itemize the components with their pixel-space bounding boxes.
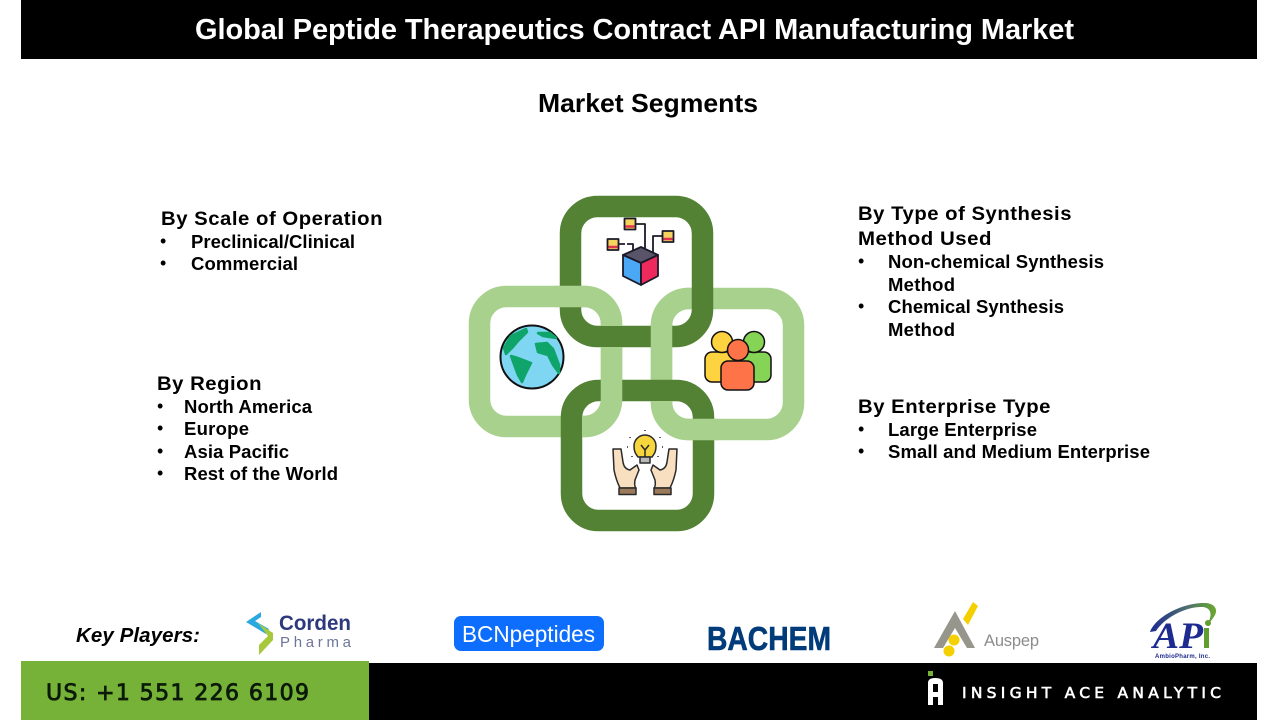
logo: AmbioPharm API — [1150, 603, 1216, 660]
text block: by enterprise type: Small and Medium Enterprise — [888, 441, 1150, 462]
heading: market segments: Market Segments — [538, 88, 758, 118]
text block: by type of synthesis method used: • — [858, 296, 864, 316]
text block: by scale of operation: Preclinical/Clinical — [191, 231, 355, 252]
text block: by scale of operation: Commercial — [191, 253, 298, 274]
brand: Insight Ace Analytic — [928, 671, 1221, 705]
logo: Auspep — [934, 602, 1039, 656]
text block: by region: Europe — [184, 418, 249, 439]
icon: globe — [500, 326, 564, 388]
icon: hands holding light bulb — [613, 430, 677, 494]
text block: by type of synthesis method used: Method Used — [858, 228, 992, 250]
text block: by region: • — [157, 463, 163, 483]
logo: Corden Pharma: Corden — [279, 612, 351, 635]
logo: BCNpeptides: BCNpeptides — [462, 621, 595, 647]
logo: Corden Pharma: Pharma — [280, 634, 352, 651]
text block: by type of synthesis method used: Non-chemical Synthesis — [888, 251, 1104, 272]
text block: by type of synthesis method used: Chemical Synthesis — [888, 296, 1064, 317]
text block: by region — [157, 373, 338, 484]
text block: by region: North America — [184, 396, 313, 417]
logo: AmbioPharm API: AmbioPharm, Inc. — [1155, 654, 1210, 660]
text block: by scale of operation: • — [160, 231, 166, 251]
footer bar — [369, 663, 1257, 720]
text block: by type of synthesis method used — [858, 203, 1104, 340]
text block: by enterprise type — [858, 396, 1150, 462]
logo: BCNpeptides — [454, 616, 604, 651]
logo: Corden Pharma — [246, 612, 352, 655]
text block: by region: Asia Pacific — [184, 441, 289, 462]
text block: by scale of operation: • — [160, 253, 166, 273]
text block: by scale of operation: By Scale of Operation — [161, 208, 383, 230]
text block: by type of synthesis method used: • — [858, 251, 864, 271]
title banner: Global Peptide Therapeutics Contract API Manufacturing Market — [195, 14, 1074, 46]
title banner — [21, 0, 1257, 59]
logo: AmbioPharm API: AP — [1151, 616, 1203, 657]
text block: by enterprise type: By Enterprise Type — [858, 396, 1051, 418]
icon: cube with nodes — [608, 218, 674, 285]
text block: by region: By Region — [157, 373, 262, 395]
text block: by type of synthesis method used: Method — [888, 319, 955, 340]
text block: by enterprise type: • — [858, 419, 864, 439]
brand: Insight Ace Analytic: INSIGHT ACE ANALYTIC — [962, 684, 1221, 702]
text block: by enterprise type: Large Enterprise — [888, 419, 1037, 440]
text block: by scale of operation — [160, 208, 383, 274]
interlocking chain diagram — [480, 206, 794, 520]
label: key players: Key Players: — [76, 624, 200, 647]
text block: by region: • — [157, 441, 163, 461]
text block: by type of synthesis method used: Method — [888, 274, 955, 295]
logo: Bachem: BACHEM — [707, 620, 831, 657]
text block: by region: • — [157, 396, 163, 416]
text block: by region: • — [157, 418, 163, 438]
text block: by region: Rest of the World — [184, 463, 338, 484]
text block: by enterprise type: • — [858, 441, 864, 461]
text block: by type of synthesis method used: By Type of Synthesis — [858, 203, 1072, 225]
icon: people group — [705, 332, 771, 390]
phone panel — [21, 661, 369, 720]
logo: Auspep: Auspep — [984, 632, 1039, 650]
phone panel: US: +1 551 226 6109 — [46, 681, 309, 706]
